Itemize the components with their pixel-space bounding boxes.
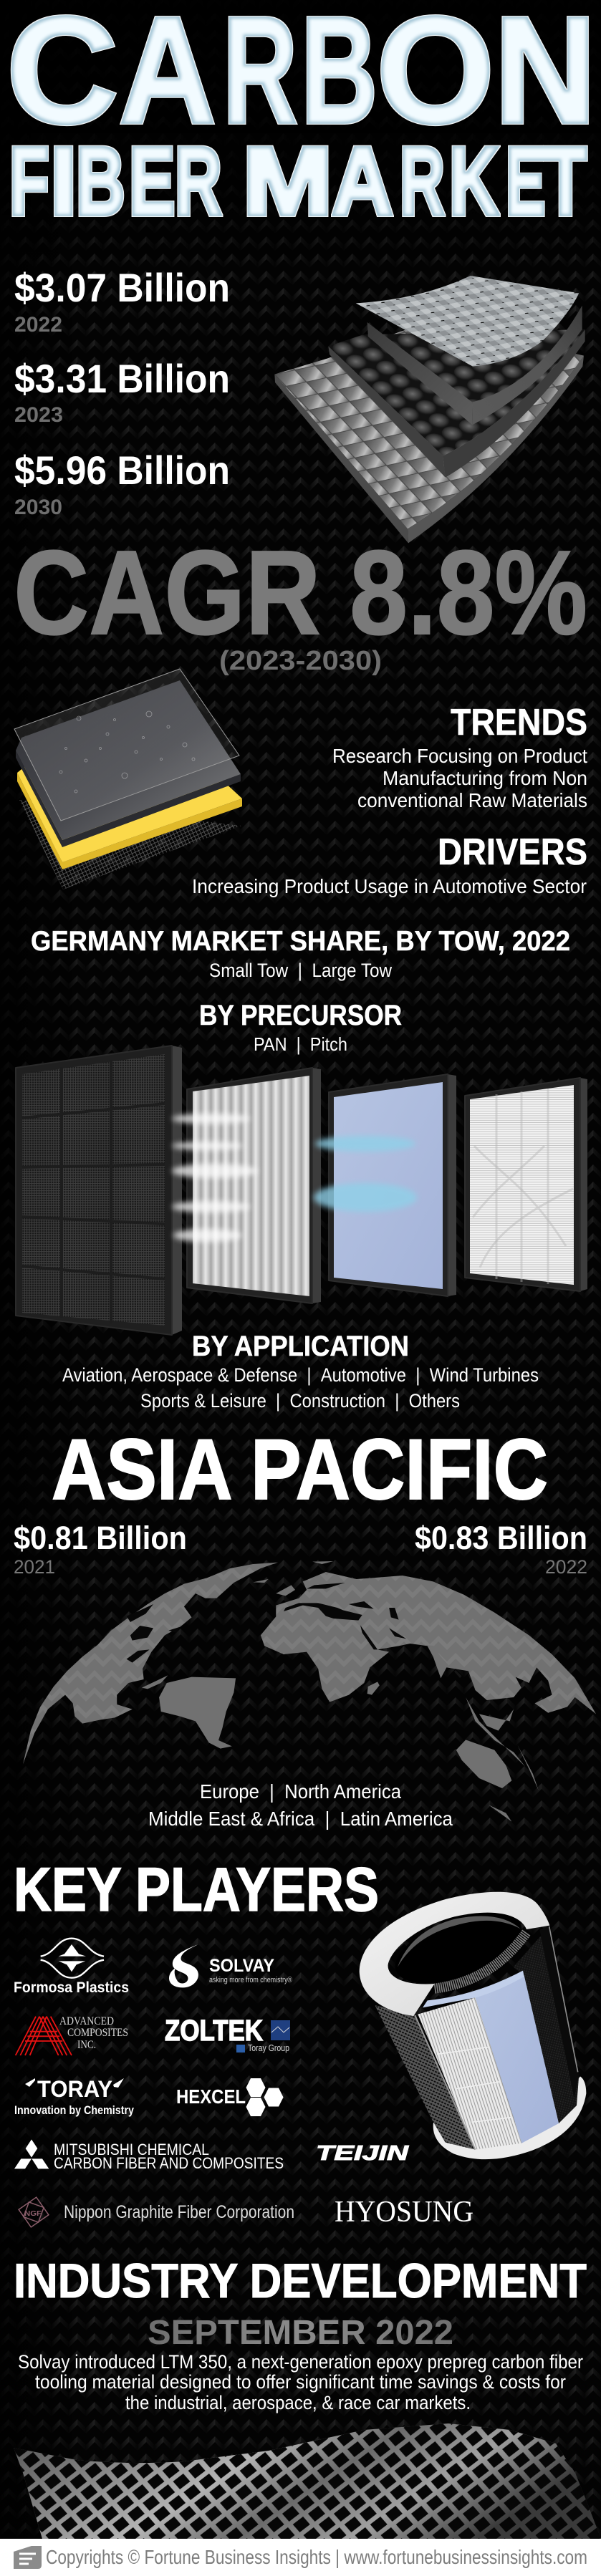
world map globe — [23, 1561, 596, 1822]
logo: Formosa Plastics — [14, 1939, 129, 1996]
market size 2022 — [14, 265, 230, 337]
logo: Toray: TORAY — [37, 2076, 112, 2102]
Asia Pacific 2022 value: $0.83 Billion — [415, 1520, 587, 1556]
other regions: Europe | North America — [200, 1780, 401, 1803]
Asia Pacific 2021 value: $0.81 Billion — [14, 1520, 187, 1556]
illustration: carbon mesh sheet — [14, 2423, 601, 2539]
market size 2022: $3.07 Billion — [14, 265, 230, 310]
logo: Nippon Graphite Fiber: NGF — [24, 2210, 42, 2218]
Germany market share: GERMANY MARKET SHARE, BY TOW, 2022 — [31, 926, 570, 957]
title: FIBER MARKET: K — [449, 128, 499, 235]
seas and lakes — [127, 1583, 406, 1663]
illustration: layered carbon fibre composite — [274, 276, 585, 543]
logo: Mitsubishi Chemical — [14, 2139, 284, 2172]
logo: Mitsubishi Chemical: CARBON FIBER AND COMPOSITES — [54, 2154, 284, 2172]
title: FIBER MARKET: I — [50, 128, 77, 235]
logo: Mitsubishi Chemical: MITSUBISHI CHEMICAL — [54, 2141, 209, 2158]
title: FIBER MARKET: E — [506, 128, 545, 235]
industry development: the industrial, aerospace, & race car markets. — [125, 2392, 471, 2413]
Asia Pacific heading: ASIA PACIFIC — [52, 1422, 548, 1518]
market size 2022: 2022 — [14, 313, 62, 337]
logo: Advanced Composites: INC. — [77, 2039, 96, 2051]
trends — [332, 702, 587, 811]
market size 2023: $3.31 Billion — [14, 356, 230, 401]
other regions: Middle East & Africa | Latin America — [148, 1808, 453, 1830]
market size 2030 — [14, 448, 230, 519]
logo: Advanced Composites: ADVANCED — [59, 2015, 114, 2027]
footer logo — [14, 2546, 42, 2569]
logo: Hyosung: HYOSUNG — [335, 2196, 473, 2229]
drivers: DRIVERS — [438, 831, 587, 873]
illustration: filter material stack — [14, 669, 242, 889]
market size 2023: 2023 — [14, 403, 63, 427]
Asia Pacific 2022 value: 2022 — [545, 1556, 587, 1578]
other regions — [148, 1780, 453, 1830]
title: FIBER MARKET: R — [175, 128, 222, 235]
market size 2023 — [14, 356, 230, 427]
logo: Solvay — [169, 1944, 292, 1987]
Germany market share: Small Tow | Large Tow — [209, 960, 392, 981]
panel 4: white filter — [465, 1078, 587, 1291]
by application: Aviation, Aerospace & Defense | Automotive | Wind Turbines — [62, 1364, 539, 1386]
panel 3: blue filter — [329, 1074, 456, 1296]
market size 2030: $5.96 Billion — [14, 448, 230, 493]
market size 2030: 2030 — [14, 496, 62, 519]
title: FIBER MARKET: B — [76, 128, 125, 235]
logo: Hexcel — [176, 2078, 284, 2116]
industry development: SEPTEMBER 2022 — [148, 2314, 453, 2352]
air flow wisps: white — [172, 1114, 258, 1242]
logo: Toray: Innovation by Chemistry — [14, 2103, 134, 2117]
logo: Formosa Plastics: Formosa Plastics — [14, 1979, 129, 1996]
logo: Solvay: asking more from chemistry® — [209, 1976, 292, 1984]
footer band — [0, 2539, 601, 2576]
title: FIBER MARKET: A — [332, 128, 393, 235]
title: CARBON — [6, 0, 596, 155]
title: FIBER MARKET: E — [129, 128, 175, 235]
drivers — [192, 831, 587, 897]
by application: BY APPLICATION — [192, 1331, 409, 1362]
by precursor — [199, 1000, 402, 1055]
logo: Advanced Composites: COMPOSITES — [67, 2027, 128, 2039]
title: FIBER MARKET — [9, 128, 588, 235]
logo: Toray — [14, 2076, 134, 2117]
by precursor: BY PRECURSOR — [199, 1000, 402, 1031]
logo: Zoltek: ZOLTEK — [165, 2014, 263, 2047]
title: FIBER MARKET: F — [9, 128, 49, 235]
by application: Sports & Leisure | Construction | Others — [140, 1390, 460, 1412]
logo: Nippon Graphite Fiber: Nippon Graphite Fiber Corporation — [64, 2202, 294, 2222]
chevron texture on land — [23, 1563, 596, 1764]
panel 2: pleated filter — [187, 1068, 321, 1303]
logo: Teijin: TEIJIN — [316, 2142, 410, 2165]
Germany market share — [31, 926, 570, 981]
by application — [62, 1331, 539, 1412]
air flow wisps: blue — [314, 1136, 417, 1212]
title: FIBER MARKET: R — [400, 128, 444, 235]
Asia Pacific 2021 value: 2021 — [14, 1556, 55, 1578]
trends: Research Focusing on Product — [332, 745, 587, 767]
drivers: Increasing Product Usage in Automotive Sector — [192, 875, 587, 897]
trends: Manufacturing from Non — [383, 767, 587, 789]
title: FIBER MARKET: T — [544, 128, 587, 235]
logo: Nippon Graphite Fiber — [19, 2197, 294, 2227]
by precursor: PAN | Pitch — [254, 1033, 347, 1055]
logo: Advanced Composites — [16, 2015, 128, 2055]
key players heading: KEY PLAYERS — [14, 1856, 379, 1924]
trends: TRENDS — [451, 702, 587, 743]
CAGR figure: (2023-2030) — [219, 646, 382, 676]
Asia Pacific 2022 value — [415, 1520, 587, 1578]
Asia Pacific 2021 value — [14, 1520, 187, 1578]
title: FIBER MARKET: M — [243, 128, 332, 235]
illustration: cylindrical filter — [360, 1892, 586, 2159]
illustration: filter panels — [16, 1046, 587, 1335]
logo: Zoltek: Toray Group — [248, 2042, 289, 2053]
industry development — [14, 2254, 587, 2413]
panel 1: outer mesh — [16, 1046, 182, 1335]
logo: Solvay: SOLVAY — [209, 1956, 274, 1976]
logo: Hexcel: HEXCEL — [176, 2085, 246, 2108]
industry development: tooling material designed to offer significant time savings & costs for — [35, 2371, 566, 2393]
trends: conventional Raw Materials — [357, 789, 587, 811]
